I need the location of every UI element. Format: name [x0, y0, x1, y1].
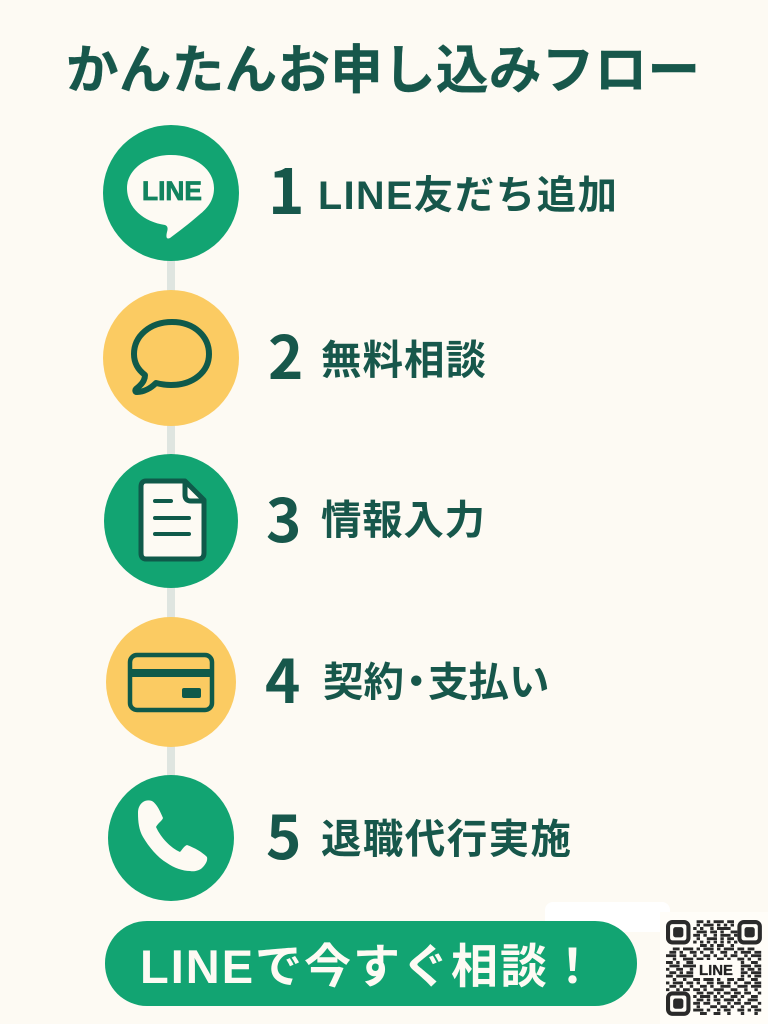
icon: LINE speech bubble: LINE: [142, 176, 202, 206]
connector line: [167, 255, 175, 785]
number 3: 3: [266, 473, 301, 560]
QR code: LINE: [699, 962, 733, 979]
number 4: 4: [265, 634, 300, 721]
label 4: 契約: [323, 659, 404, 705]
step 5: resignation service: [108, 775, 571, 901]
QR code: [660, 912, 768, 1024]
call to action button: [105, 921, 637, 1006]
icon: LINE speech bubble: [103, 125, 239, 261]
label 4: ・: [396, 659, 436, 705]
label 5: 退職代行実施: [321, 816, 571, 862]
icon: chat bubble: [103, 290, 239, 426]
step 3: information entry: [104, 454, 485, 588]
step 4: contract and payment: [106, 617, 550, 747]
call to action button: LINEで今すぐ相談！: [140, 940, 596, 993]
step 1: LINE friend add: [103, 125, 617, 261]
label 2: 無料相談: [321, 337, 486, 383]
icon: telephone: [108, 775, 234, 901]
number 1: 1: [268, 142, 305, 232]
white patch above button: [545, 902, 670, 932]
number 2: 2: [268, 310, 303, 397]
label 3: 情報入力: [321, 497, 485, 543]
title: かんたんお申し込みフロー: [66, 41, 700, 100]
number 5: 5: [266, 790, 301, 877]
icon: document: [104, 454, 238, 588]
label 4: 支払い: [428, 659, 550, 705]
icon: credit card: [106, 617, 236, 747]
step 2: free consultation: [103, 290, 486, 426]
label 1: LINE友だち追加: [318, 174, 617, 218]
